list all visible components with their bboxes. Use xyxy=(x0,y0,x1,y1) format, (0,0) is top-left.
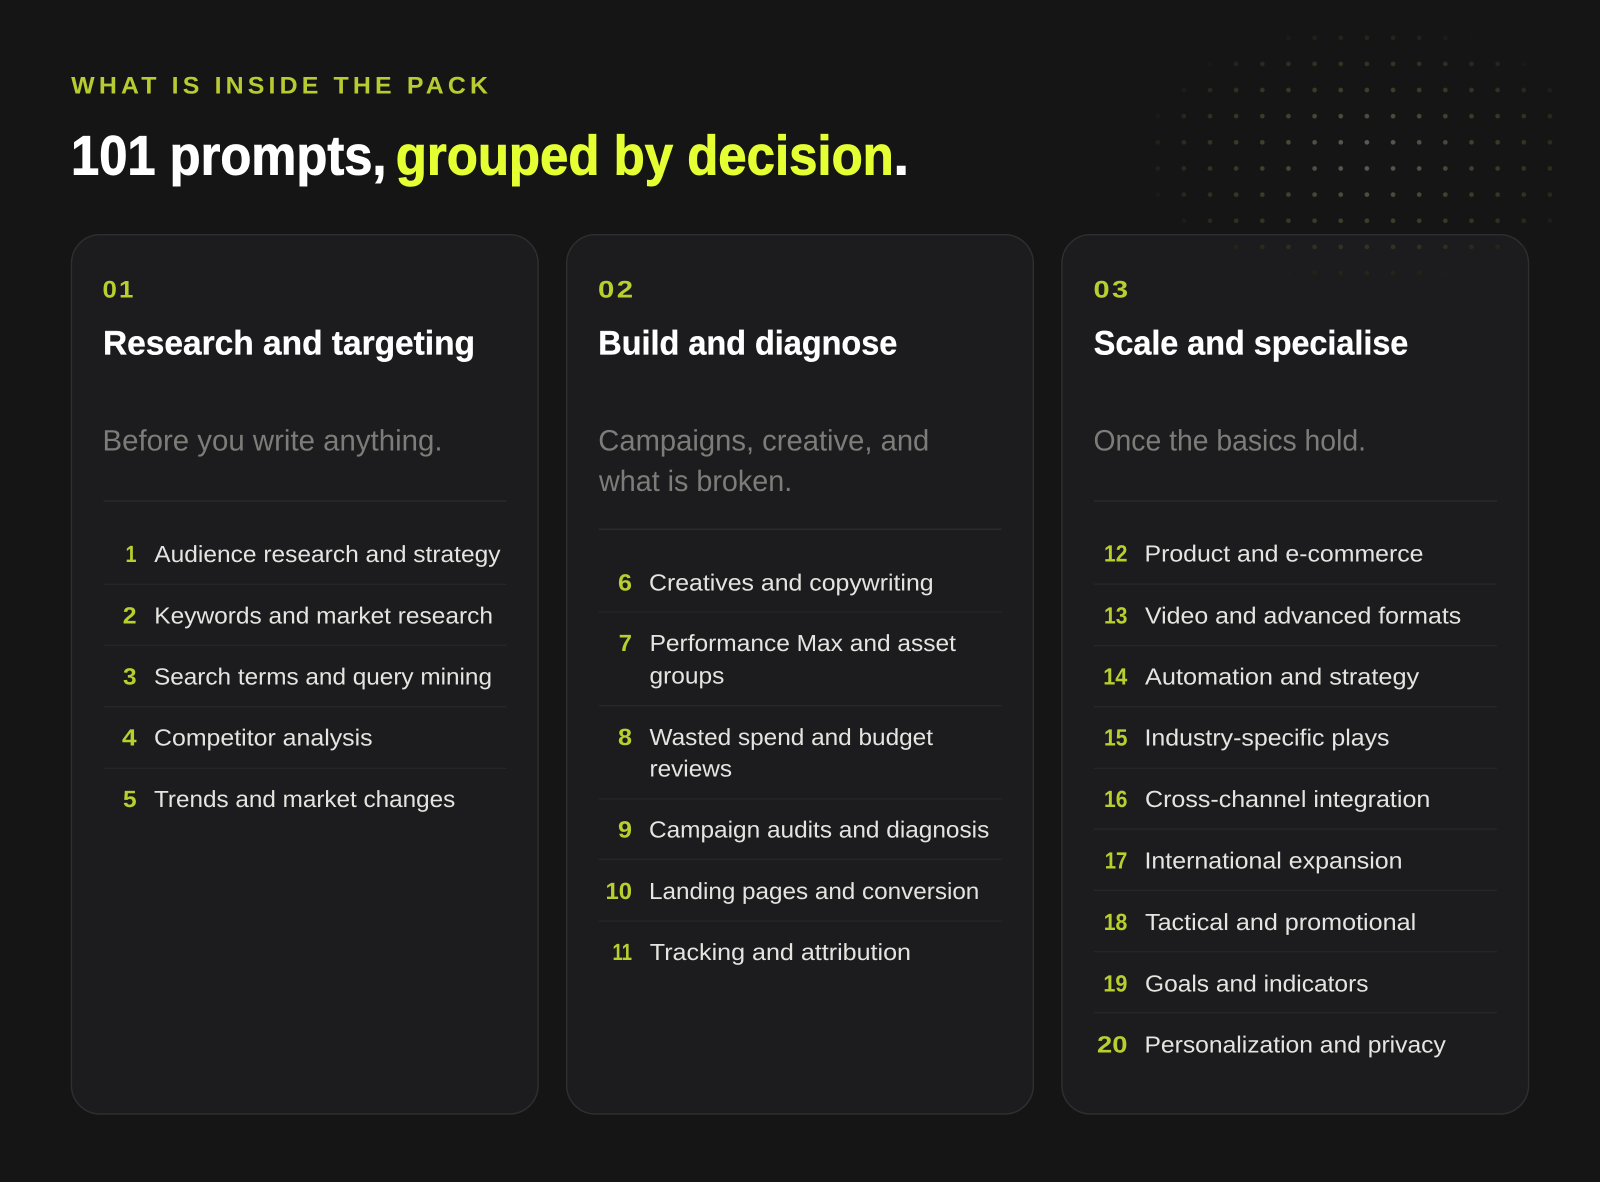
item 8: reviews xyxy=(650,756,732,782)
item 7: Performance Max and asset xyxy=(650,630,957,656)
item 1: Audience research and strategy xyxy=(154,541,501,567)
card number 02: 02 xyxy=(598,277,636,304)
item 10: Landing pages and conversion xyxy=(649,878,979,904)
item 5: Trends and market changes xyxy=(154,786,455,812)
title: grouped by decision xyxy=(396,124,894,186)
item 14: Automation and strategy xyxy=(1145,664,1420,690)
item 16: Cross-channel integration xyxy=(1145,786,1430,812)
item 16: 16 xyxy=(1104,786,1127,812)
item 9: Campaign audits and diagnosis xyxy=(649,817,989,843)
item 15: 15 xyxy=(1104,725,1127,751)
item 18: Tactical and promotional xyxy=(1145,909,1416,935)
list: topics 1 to 5 xyxy=(103,541,506,812)
panel: card 01 research and targeting xyxy=(71,235,538,1114)
item 13: 13 xyxy=(1104,602,1127,628)
card description line 2: what is broken. xyxy=(598,465,792,498)
item 12: 12 xyxy=(1104,541,1127,567)
item 19: 19 xyxy=(1103,970,1127,996)
eyebrow: WHAT IS INSIDE THE PACK xyxy=(71,72,492,99)
item 4: 4 xyxy=(122,725,137,751)
item 3: 3 xyxy=(123,664,137,690)
dot grid decoration xyxy=(1156,36,1552,275)
list: topics 6 to 11 xyxy=(599,570,1002,965)
item 9: 9 xyxy=(618,817,632,843)
item 18: 18 xyxy=(1104,909,1127,935)
item 12: Product and e-commerce xyxy=(1144,541,1424,567)
card heading: Scale and specialise xyxy=(1094,324,1408,362)
item 2: Keywords and market research xyxy=(154,602,493,628)
item 19: Goals and indicators xyxy=(1145,970,1368,996)
panel: card 02 build and diagnose xyxy=(567,235,1033,1114)
item 2: 2 xyxy=(123,602,137,628)
item 7: groups xyxy=(650,663,724,689)
item 7 xyxy=(619,630,957,689)
item 17: International expansion xyxy=(1144,848,1402,874)
item 6: 6 xyxy=(618,570,632,596)
card heading: Build and diagnose xyxy=(598,324,897,362)
item 20: 20 xyxy=(1097,1031,1127,1057)
item 7: 7 xyxy=(619,630,632,656)
card description: Before you write anything. xyxy=(102,424,442,457)
item 6: Creatives and copywriting xyxy=(649,570,934,596)
title xyxy=(71,124,909,186)
item 13: Video and advanced formats xyxy=(1145,602,1461,628)
item 8: 8 xyxy=(618,724,632,750)
item 20: Personalization and privacy xyxy=(1144,1031,1446,1057)
item 8: Wasted spend and budget xyxy=(650,724,934,750)
card number 03: 03 xyxy=(1094,277,1130,304)
item 8 xyxy=(618,724,934,782)
card heading: Research and targeting xyxy=(103,324,475,362)
list: topics 12 to 20 xyxy=(1094,541,1497,1057)
card number 01: 01 xyxy=(102,277,136,304)
title: 101 prompts, xyxy=(71,124,386,186)
item 3: Search terms and query mining xyxy=(154,664,492,690)
item 15: Industry-specific plays xyxy=(1144,725,1390,751)
card description: Campaigns, creative, and xyxy=(598,424,929,457)
item 17: 17 xyxy=(1105,848,1127,874)
item 1: 1 xyxy=(126,541,136,567)
item 11: 11 xyxy=(612,939,632,965)
item 4: Competitor analysis xyxy=(154,725,373,751)
item 10: 10 xyxy=(606,878,632,904)
item 11: Tracking and attribution xyxy=(650,939,911,965)
panel: card 03 scale and specialise xyxy=(1062,235,1529,1114)
item 14: 14 xyxy=(1103,664,1127,690)
title: . xyxy=(894,124,909,186)
card description: Once the basics hold. xyxy=(1094,424,1366,457)
item 5: 5 xyxy=(123,786,137,812)
